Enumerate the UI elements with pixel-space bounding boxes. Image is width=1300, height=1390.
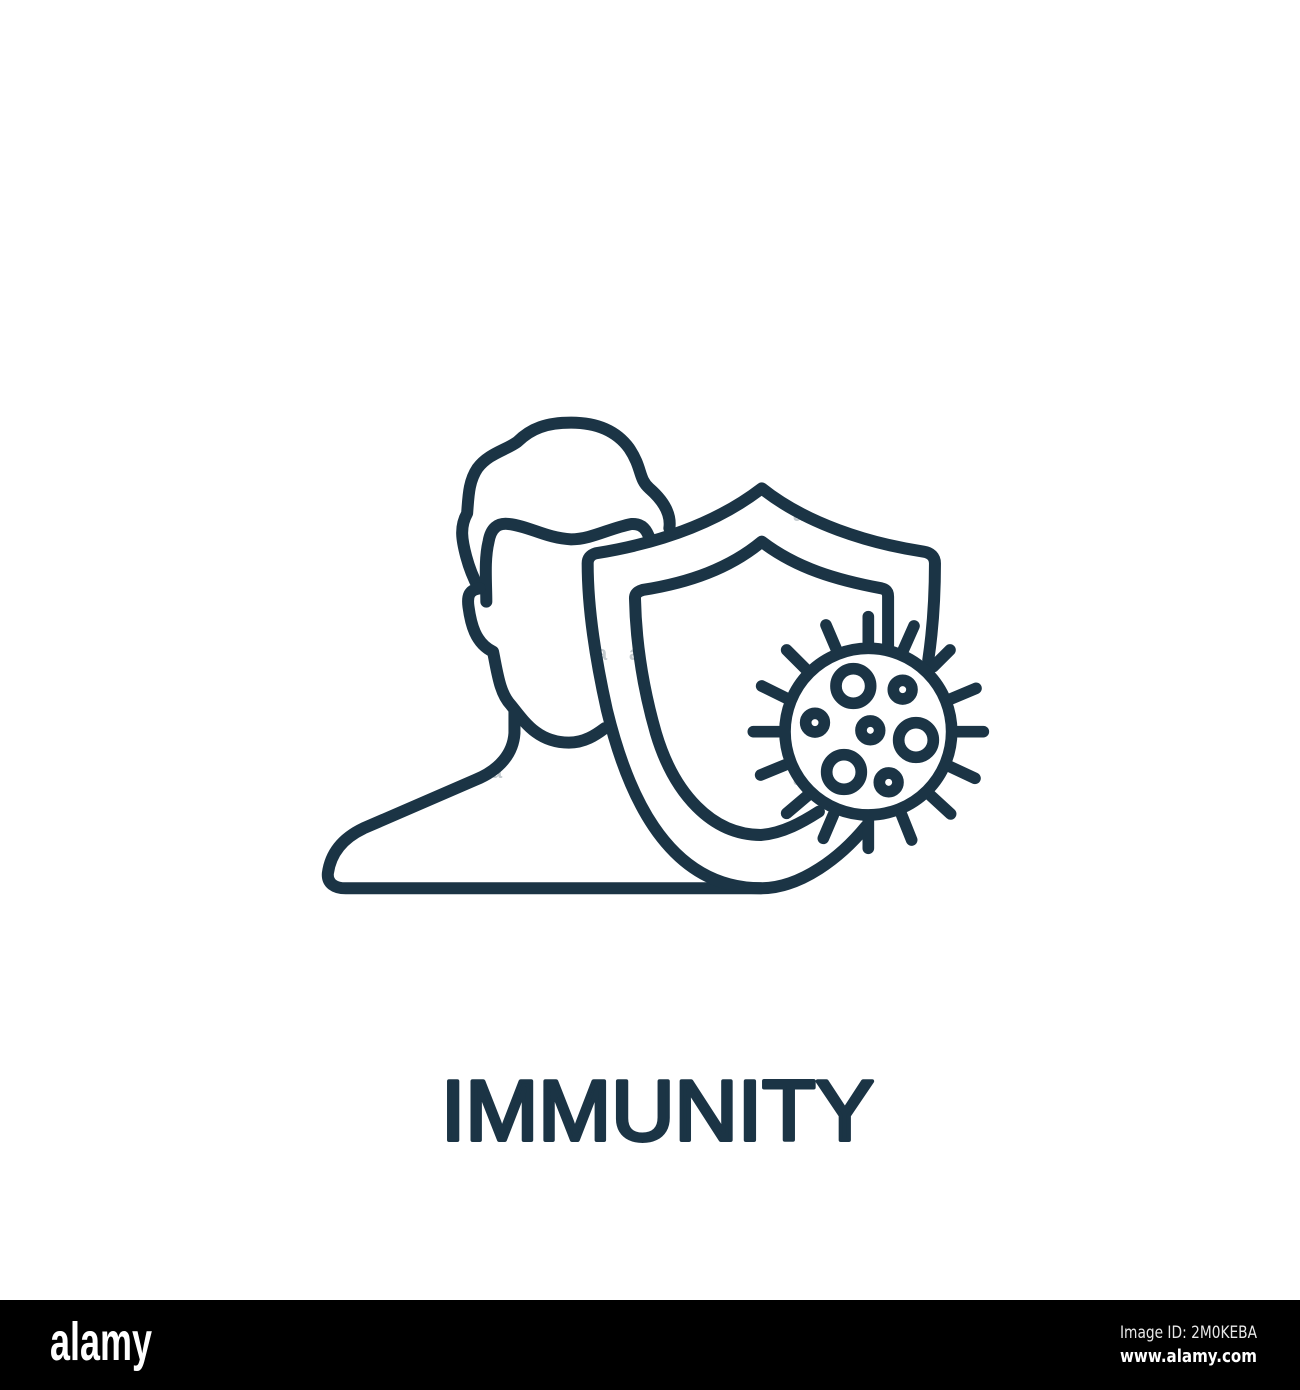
watermark marks: [491, 504, 805, 790]
virus spikes: [753, 617, 983, 848]
website: www.alamy.com: [1120, 1346, 1257, 1367]
title: IMMUNITY: [441, 1064, 874, 1159]
watermark marks: a: [793, 504, 805, 526]
watermark marks: a: [494, 513, 506, 535]
watermark marks: a: [596, 643, 608, 665]
watermark marks: a: [491, 761, 503, 783]
icon: virus: [753, 617, 983, 848]
small cells: [893, 680, 912, 699]
footer bar: [0, 1300, 1300, 1390]
large cells: [836, 669, 871, 703]
watermark marks: a: [629, 643, 641, 665]
watermark marks: a: [793, 768, 805, 790]
image id: Image ID: 2M0KEBA: [1120, 1323, 1257, 1343]
virus body: [785, 648, 952, 815]
icon: person silhouette: [328, 423, 761, 888]
icon: person with shield and virus: [328, 423, 983, 888]
logo: alamy: alamy: [50, 1312, 152, 1372]
icon: shield: [588, 488, 935, 888]
